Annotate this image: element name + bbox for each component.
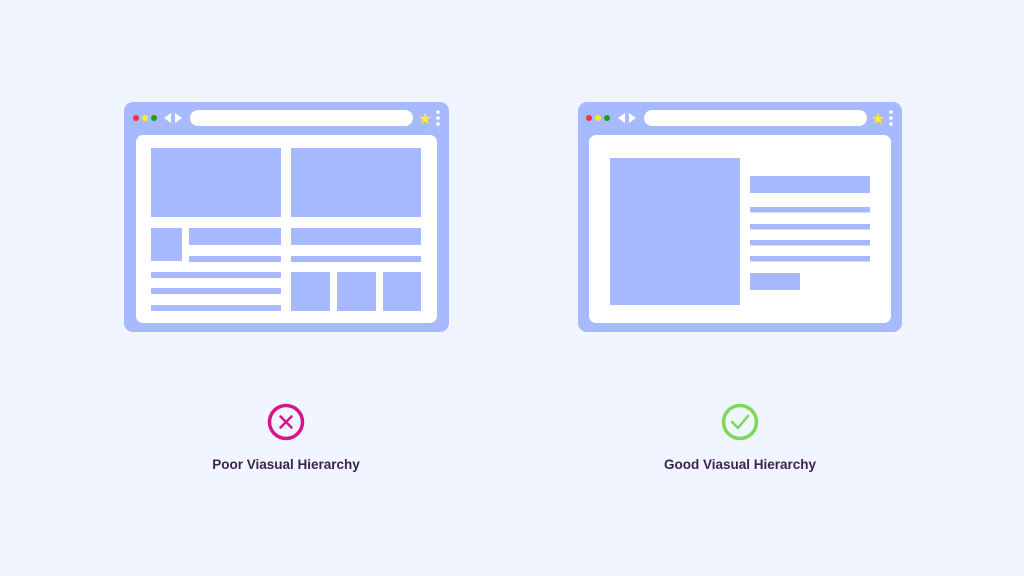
nav arrows	[618, 113, 636, 123]
menu dots	[889, 110, 893, 126]
url bar	[190, 110, 413, 126]
url bar	[644, 110, 867, 126]
icon: star: ★	[871, 111, 885, 128]
icon: check circle	[724, 406, 756, 438]
menu dots	[436, 110, 440, 126]
panel: poor hierarchy browser	[124, 102, 449, 332]
label: poor: Poor Viasual Hierarchy	[212, 457, 360, 472]
nav arrows	[164, 113, 182, 123]
icon: star: ★	[418, 111, 432, 128]
panel: good hierarchy browser	[578, 102, 902, 332]
page content area	[589, 135, 891, 323]
browser dots	[133, 115, 157, 121]
page content area	[136, 135, 437, 323]
icon: cross circle	[270, 406, 302, 438]
browser dots	[586, 115, 610, 121]
label: good: Good Viasual Hierarchy	[664, 457, 817, 472]
